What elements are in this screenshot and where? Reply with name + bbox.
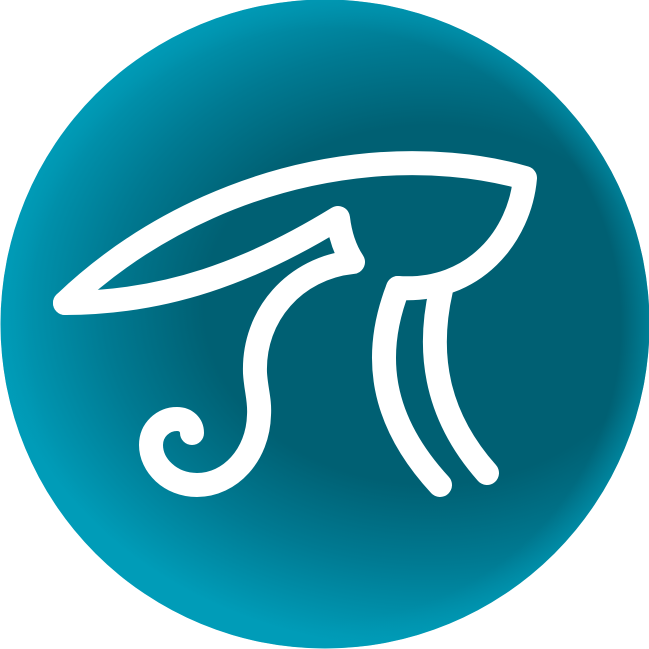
- ear outline: [65, 163, 525, 303]
- icon: white line mark: [65, 163, 525, 485]
- left leg: [384, 288, 440, 485]
- right leg: [435, 290, 487, 473]
- ear lower edge and curl: [65, 218, 353, 485]
